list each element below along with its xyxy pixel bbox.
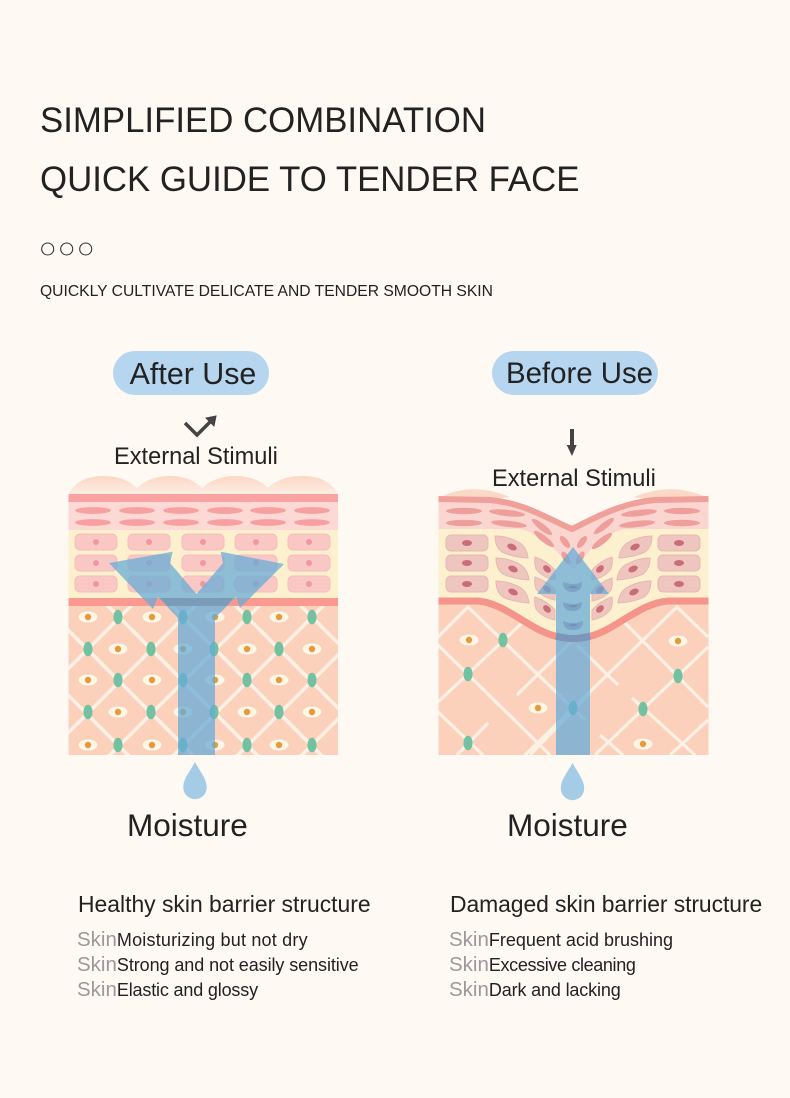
compressed lenses	[446, 508, 700, 566]
cream cell layer	[68, 530, 338, 598]
pill: before use	[492, 351, 658, 395]
list item: SkinFrequent acid brushing	[449, 928, 673, 951]
skin bumps	[68, 476, 338, 494]
skin top right	[634, 489, 708, 502]
cream cell layer	[438, 525, 708, 638]
chart: healthy skin cross-section	[68, 476, 338, 755]
band under arrow	[556, 636, 590, 638]
pale pink layer	[68, 502, 338, 530]
red band	[68, 598, 338, 606]
heading: Damaged skin barrier structure	[450, 891, 762, 917]
band under arrow	[160, 598, 233, 606]
label: moisture left: Moisture	[127, 807, 248, 843]
pill: after use: After Use	[130, 357, 256, 391]
skin top left	[438, 489, 510, 502]
title	[40, 101, 579, 199]
pill: after use	[113, 351, 269, 395]
lower band	[438, 601, 708, 638]
diagrams	[41, 242, 709, 800]
moisture arrow	[109, 552, 284, 755]
pale pink layer	[438, 499, 708, 570]
lower dermis layer with lattice	[438, 595, 708, 755]
subtitle: QUICKLY CULTIVATE DELICATE AND TENDER SMOOTH SKIN	[40, 283, 493, 300]
decorative circles	[42, 243, 92, 255]
list item: SkinDark and lacking	[449, 978, 621, 1001]
text block: healthy skin	[77, 891, 371, 1001]
chart: damaged skin cross-section	[438, 489, 708, 755]
text block: damaged skin	[449, 891, 762, 1001]
icon: check arrow	[185, 416, 216, 435]
damaged cells	[446, 535, 700, 630]
list item: SkinExcessive cleaning	[449, 953, 636, 976]
label: external stimuli left: External Stimuli	[114, 444, 278, 470]
icon: water drop right	[561, 763, 584, 800]
title: SIMPLIFIED COMBINATION	[40, 101, 486, 140]
top band	[68, 494, 338, 502]
pill: before use: Before Use	[506, 357, 653, 390]
icon: down arrow	[567, 429, 577, 456]
label: external stimuli right: External Stimuli	[492, 466, 656, 492]
label: moisture right: Moisture	[507, 807, 628, 843]
upper band	[438, 499, 708, 529]
lower dermis layer with lattice	[68, 606, 338, 755]
title: QUICK GUIDE TO TENDER FACE	[40, 160, 579, 199]
list item: SkinStrong and not easily sensitive	[77, 953, 359, 976]
moisture arrow	[537, 547, 609, 755]
list item: SkinMoisturizing but not dry	[77, 928, 308, 951]
icon: water drop left	[183, 762, 207, 799]
list item: SkinElastic and glossy	[77, 978, 258, 1001]
heading: Healthy skin barrier structure	[78, 891, 371, 917]
